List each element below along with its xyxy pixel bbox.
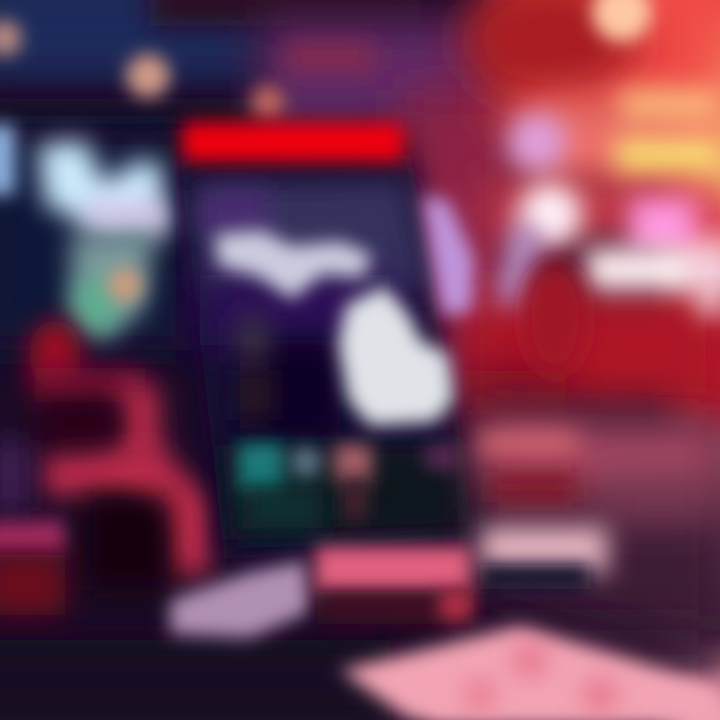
map: lower peninsula <box>338 286 455 426</box>
phone chart bars <box>238 315 459 528</box>
floor <box>470 410 720 690</box>
phone header bar <box>182 122 404 162</box>
phone body <box>180 122 480 560</box>
pink card on floor <box>340 626 720 720</box>
white glowing shape, left <box>0 125 170 340</box>
ceiling lights <box>0 20 375 119</box>
side glow beside phone <box>422 195 475 316</box>
red chair, left <box>0 320 210 615</box>
white glowing shape, right <box>495 112 720 376</box>
red glowing backdrop, right <box>460 0 720 190</box>
red mid band, right <box>465 180 720 415</box>
stacked cards in front of phone <box>170 546 473 638</box>
map: upper peninsula <box>215 230 372 300</box>
